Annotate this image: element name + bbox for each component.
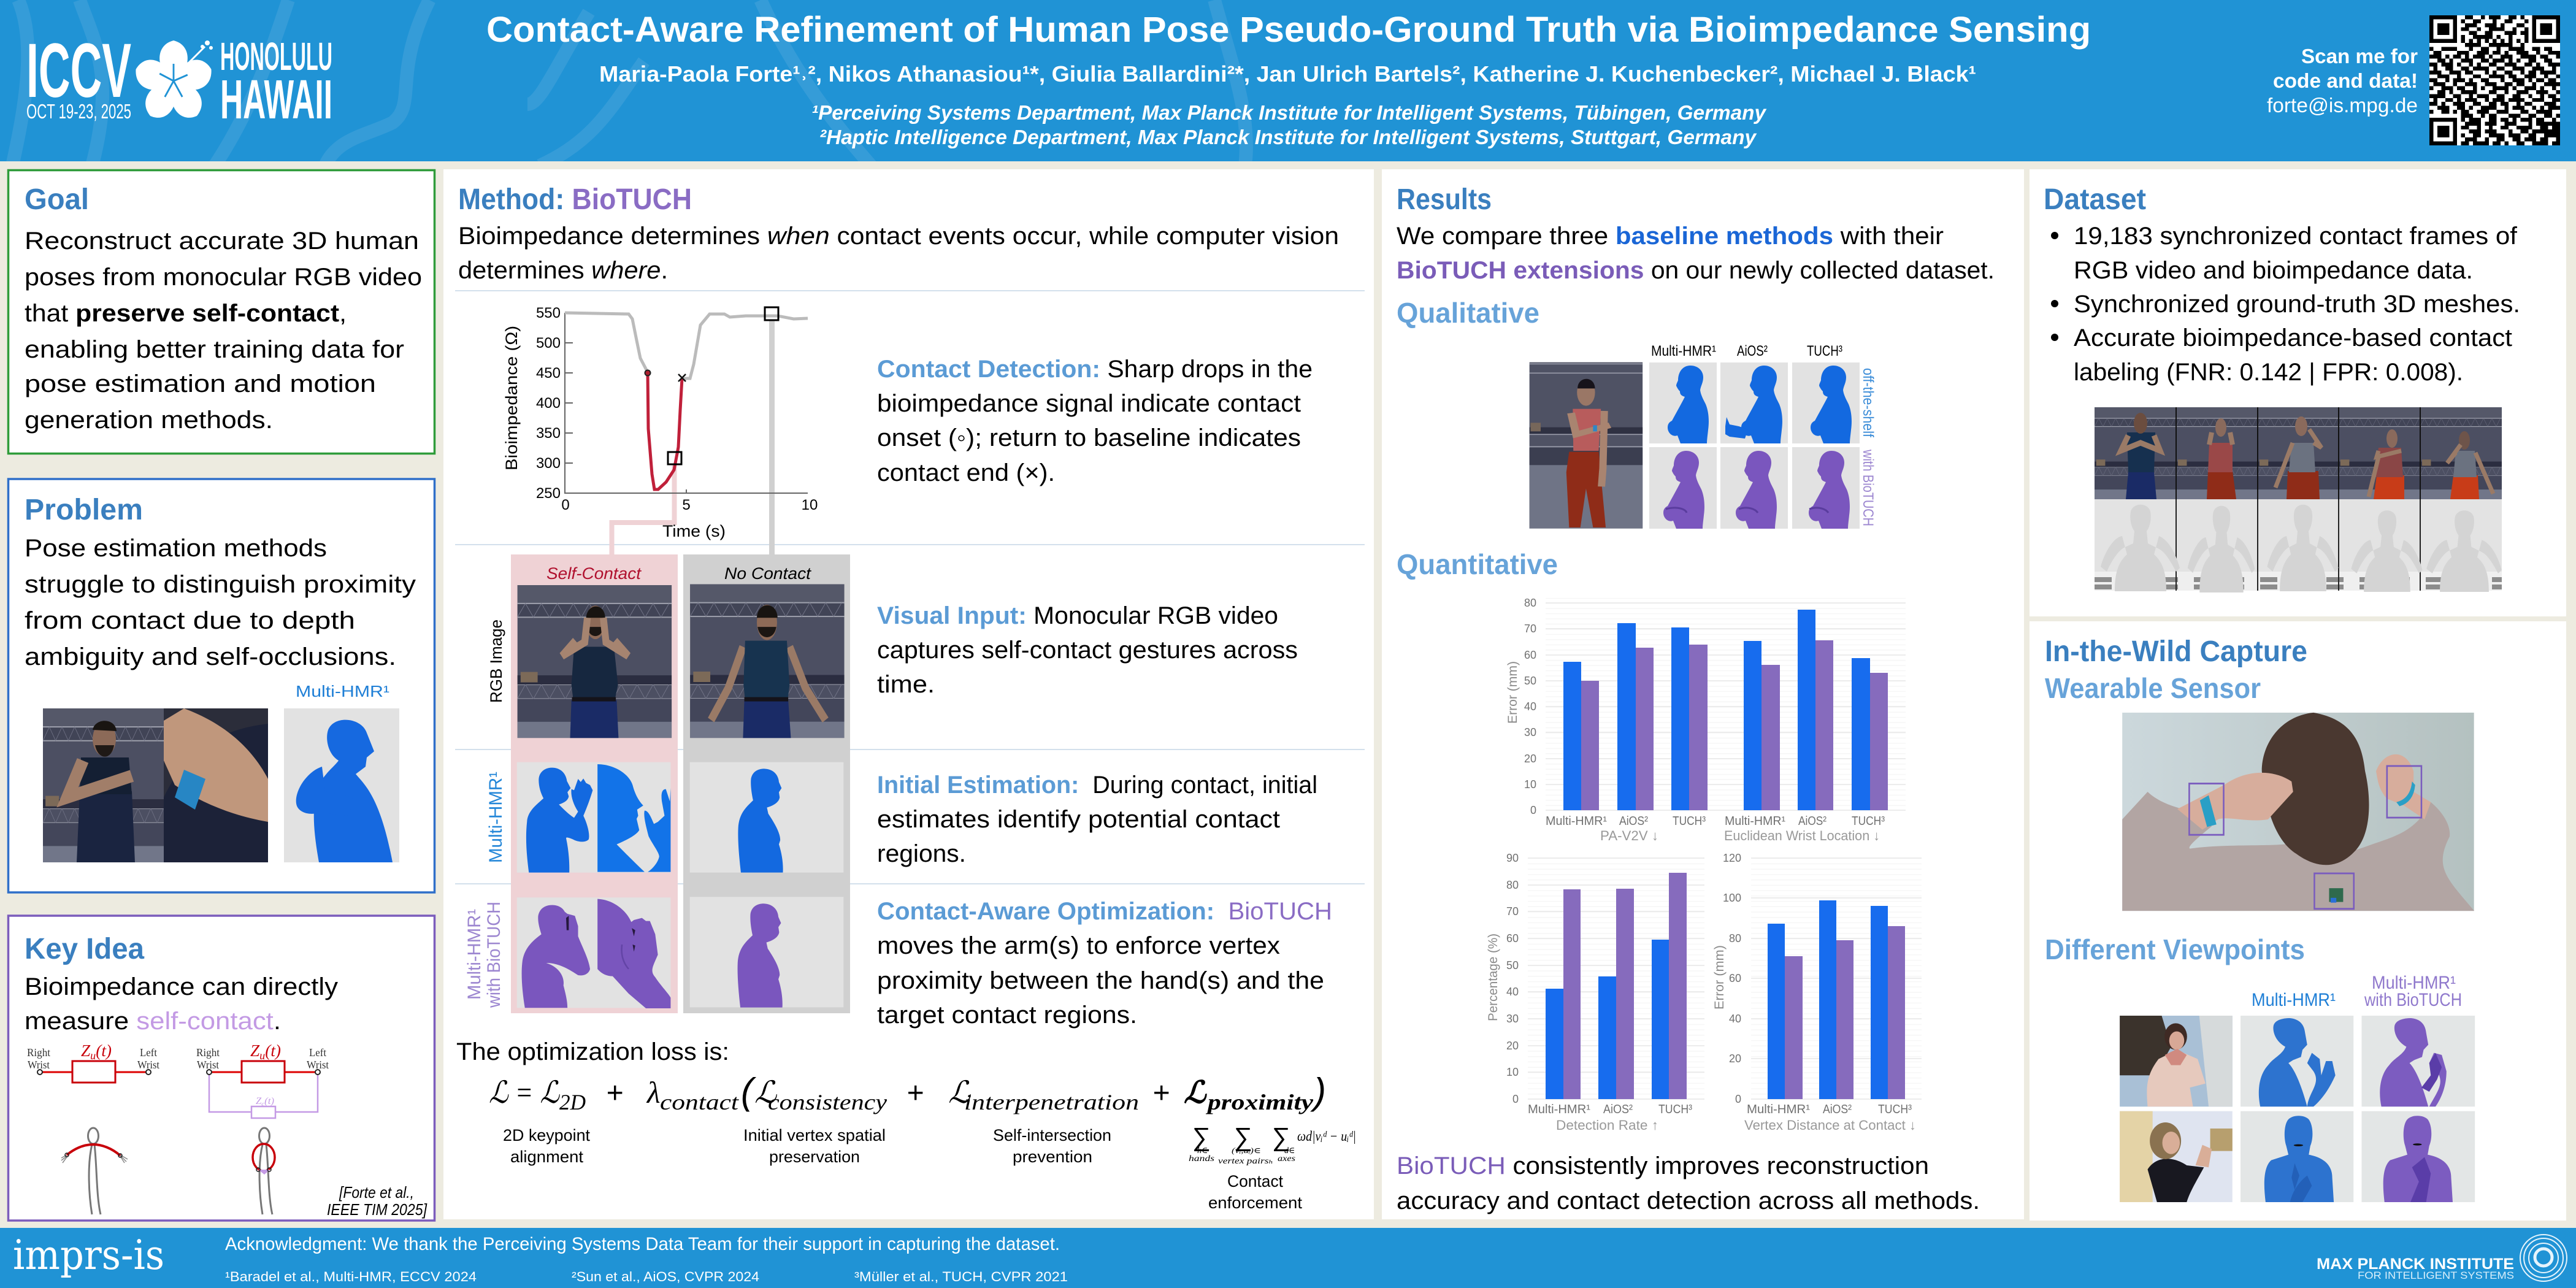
bar chart: detection rate: 90 xyxy=(1506,852,1519,864)
chart: bioimpedance signal: 250 xyxy=(536,485,561,502)
text: goal description: pose estimation and motion xyxy=(25,370,376,397)
tile: BioTUCH indoor xyxy=(2362,1111,2475,1202)
list: dataset facts: Synchronized ground-truth 3D meshes. xyxy=(2074,291,2520,318)
panel: dataset xyxy=(2030,169,2566,616)
citation: [Forte et al., xyxy=(339,1183,414,1202)
equation: proximity term: ∑ xyxy=(1192,1122,1211,1151)
bar chart: detection rate: Percentage (%) xyxy=(1486,933,1500,1021)
equation: optimization loss: + xyxy=(1152,1077,1170,1110)
text: method intro xyxy=(458,223,1339,284)
equation: optimization loss: + xyxy=(606,1077,623,1110)
labels: viewpoint columns xyxy=(2252,973,2462,1010)
text: problem description: from contact due to depth xyxy=(25,607,355,634)
tile: BioTUCH outdoor xyxy=(2362,1016,2475,1106)
equation: optimization loss: proximity xyxy=(1205,1090,1314,1114)
column labels: Multi-HMR¹ xyxy=(1651,343,1716,359)
text: visual input: captures self-contact gestures across xyxy=(877,637,1298,664)
bar chart: vertex distance at contact: Error (mm) xyxy=(1712,945,1727,1010)
logo: ICCV Honolulu Hawaii: OCT 19-23, 2025 xyxy=(26,100,131,123)
bar chart: PA-V2V and wrist location error: 30 xyxy=(1524,726,1536,738)
circuit diagram: self-contact: Z xyxy=(256,1096,261,1106)
list: dataset facts: 19,183 synchronized contact frames of xyxy=(2074,223,2518,250)
tile: Multi-HMR outdoor xyxy=(2241,1016,2353,1106)
text: goal description: generation methods. xyxy=(25,407,273,434)
circuit diagram: no contact: Wrist xyxy=(137,1059,159,1071)
circuit diagram: no contact: Z xyxy=(81,1041,90,1060)
photo: woman outdoors xyxy=(2120,1016,2233,1106)
chart: bioimpedance signal xyxy=(502,305,818,540)
text: problem description: Pose estimation methods xyxy=(25,535,327,562)
text: contact-aware optimization: Contact-Aware Optimization: BioTUCH xyxy=(877,898,1332,925)
logo: imprs-is: imprs-is xyxy=(13,1232,164,1279)
bar chart: detection rate: 40 xyxy=(1506,986,1519,998)
photo: man with arm across body and hand close-up xyxy=(43,708,268,862)
scan callout xyxy=(2267,45,2418,117)
circuit diagram: no contact: u xyxy=(90,1049,96,1062)
caption: self-intersection prevention xyxy=(993,1126,1111,1166)
chart: bioimpedance signal: 350 xyxy=(536,425,561,442)
labels: viewpoint columns: Multi-HMR¹ xyxy=(2252,990,2336,1010)
logo: Max Planck Institute xyxy=(2317,1235,2567,1281)
circuit diagram: self-contact: Left xyxy=(309,1046,326,1059)
heading: goal: Goal xyxy=(25,183,89,216)
chart: bioimpedance signal: 0 xyxy=(561,497,570,513)
panel: results xyxy=(1382,169,2024,1219)
bar chart: PA-V2V and wrist location error xyxy=(1506,597,1906,843)
heading: problem: Problem xyxy=(25,494,143,526)
equation: optimization loss: ℒ xyxy=(1184,1075,1207,1110)
text: contact detection: contact end (×). xyxy=(877,459,1055,486)
bar chart: vertex distance at contact: Multi-HMR¹ xyxy=(1747,1103,1810,1116)
text: contact detection xyxy=(877,356,1313,486)
bar chart: PA-V2V and wrist location error: 20 xyxy=(1524,753,1536,765)
bar chart: PA-V2V and wrist location error: 80 xyxy=(1524,597,1536,609)
row label: with BioTUCH: with BioTUCH xyxy=(1860,449,1876,526)
bar chart: vertex distance at contact: 120 xyxy=(1723,852,1741,864)
caption: 2D keypoint alignment: alignment xyxy=(510,1148,583,1166)
bar chart: vertex distance at contact: 80 xyxy=(1729,932,1741,945)
scan callout: forte@is.mpg.de xyxy=(2267,94,2418,117)
tile: AiOS with BioTUCH xyxy=(1720,447,1788,529)
text: contact-aware optimization xyxy=(877,898,1332,1029)
text: initial estimation: estimates identify potential contact xyxy=(877,806,1280,833)
heading: in-the-wild capture: In-the-Wild Capture xyxy=(2045,635,2307,668)
row label: Multi-HMR with BioTUCH: with BioTUCH xyxy=(484,902,504,1008)
bar chart: vertex distance at contact: AiOS² xyxy=(1823,1103,1852,1116)
equation: proximity term: ωd|vᵢᵈ − uᵢᵈ| xyxy=(1297,1129,1356,1144)
QR code xyxy=(2429,15,2560,145)
image strip: RGB frames xyxy=(2095,407,2502,591)
chart: bioimpedance signal: 10 xyxy=(802,497,818,513)
circuit diagram: self-contact: Wrist xyxy=(197,1059,219,1071)
heading: method: Method: BioTUCH xyxy=(458,183,692,216)
bar chart: PA-V2V and wrist location error: 0 xyxy=(1530,804,1536,816)
caption: 2D keypoint alignment: 2D keypoint xyxy=(503,1126,590,1144)
bar chart: detection rate: 70 xyxy=(1506,905,1519,918)
photo: woman crossing arm xyxy=(1530,362,1643,529)
tile: Multi-HMR self-contact xyxy=(517,762,670,873)
bar chart: PA-V2V and wrist location error: 70 xyxy=(1524,623,1536,635)
logo: ICCV Honolulu Hawaii xyxy=(26,28,332,131)
bar chart: PA-V2V and wrist location error: Euclidean Wrist Location ↓ xyxy=(1724,828,1880,843)
circuit diagram: no contact: Right xyxy=(27,1046,50,1059)
row label: Multi-HMR with BioTUCH xyxy=(464,902,504,1008)
bar chart: PA-V2V and wrist location error: TUCH³ xyxy=(1673,815,1706,828)
equation: proximity term xyxy=(1189,1122,1356,1166)
caption: 2D keypoint alignment xyxy=(503,1126,590,1166)
heading: qualitative: Qualitative xyxy=(1397,297,1539,329)
equation: optimization loss: 2D xyxy=(559,1090,586,1114)
heading: quantitative: Quantitative xyxy=(1397,548,1558,580)
text: visual input xyxy=(877,602,1298,698)
caption: contact enforcement xyxy=(1208,1172,1302,1212)
footer band xyxy=(0,1228,2576,1288)
caption: initial vertex spatial preservation: preservation xyxy=(769,1148,860,1166)
tile: TUCH with BioTUCH xyxy=(1792,447,1860,529)
equation: proximity term: vertex pairsₕ xyxy=(1218,1157,1273,1166)
bar chart: detection rate: 10 xyxy=(1506,1066,1519,1078)
text: key idea description: Bioimpedance can directly xyxy=(25,973,338,1000)
photo: woman indoors xyxy=(2120,1111,2233,1202)
authors: Maria-Paola Forte¹˒², Nikos Athanasiou¹*, Giulia Ballardini²*, Jan Ulrich Bartels², Katherine J. Kuchenbecker², Michael J. Black¹ xyxy=(599,61,1976,86)
qualitative grid xyxy=(1649,343,1876,529)
text: results intro: We compare three baseline methods with their xyxy=(1397,223,1944,250)
text: contact detection: Contact Detection: Sharp drops in the xyxy=(877,356,1313,383)
header band xyxy=(0,0,2576,166)
image strip: ground-truth meshes xyxy=(2095,499,2502,592)
bar chart: vertex distance at contact: 0 xyxy=(1735,1093,1741,1105)
logo: ICCV Honolulu Hawaii: ICCV xyxy=(26,28,131,113)
text: key idea description: measure self-contact . xyxy=(25,1008,281,1035)
bar chart: vertex distance at contact: 20 xyxy=(1729,1052,1741,1065)
bar chart: detection rate: TUCH³ xyxy=(1658,1103,1692,1116)
equation: optimization loss: ( xyxy=(741,1071,757,1112)
bar chart: PA-V2V and wrist location error: Multi-HMR¹ xyxy=(1546,815,1607,828)
logo: ICCV Honolulu Hawaii: HAWAII xyxy=(220,69,332,131)
text: results conclusion: accuracy and contact detection across all methods. xyxy=(1397,1187,1980,1214)
bar chart: PA-V2V and wrist location error: AiOS² xyxy=(1798,815,1827,828)
column labels: AiOS² xyxy=(1737,343,1768,359)
bar chart: detection rate: 80 xyxy=(1506,879,1519,891)
tile: TUCH off-the-shelf xyxy=(1792,362,1860,443)
bar chart: detection rate: Multi-HMR¹ xyxy=(1528,1103,1590,1116)
labels: viewpoint columns: Multi-HMR¹ xyxy=(2372,973,2456,993)
bar chart: detection rate: 0 xyxy=(1512,1093,1519,1105)
text: goal description: that preserve self-contact , xyxy=(25,300,347,327)
text: contact-aware optimization: moves the arm(s) to enforce vertex xyxy=(877,932,1280,959)
viewpoint grid xyxy=(2120,1016,2475,1202)
text: goal description: enabling better training data for xyxy=(25,336,404,363)
chart: bioimpedance signal: 5 xyxy=(682,497,691,513)
circuit diagram: self-contact: Z xyxy=(250,1041,259,1060)
circuit diagram: no contact: Wrist xyxy=(28,1059,50,1071)
text: results conclusion: BioTUCH consistently improves reconstruction xyxy=(1397,1152,1929,1179)
bar chart: detection rate: AiOS² xyxy=(1603,1103,1633,1116)
tile: AiOS off-the-shelf xyxy=(1720,362,1788,443)
bar chart: PA-V2V and wrist location error: PA-V2V ↓ xyxy=(1600,828,1658,843)
bar chart: detection rate: Detection Rate ↑ xyxy=(1556,1117,1658,1133)
label: Multi-HMR: Multi-HMR¹ xyxy=(296,682,389,700)
caption: self-intersection prevention: prevention xyxy=(1013,1148,1092,1166)
row label: RGB image: RGB Image xyxy=(487,619,505,703)
text: visual input: time. xyxy=(877,671,935,698)
chart: bioimpedance signal: 400 xyxy=(536,395,561,412)
bar chart: PA-V2V and wrist location error: 50 xyxy=(1524,675,1536,687)
equation: optimization loss: contact xyxy=(660,1090,739,1114)
chart: bioimpedance signal: 500 xyxy=(536,335,561,351)
tile: Multi-HMR no contact xyxy=(690,762,843,873)
text: results conclusion xyxy=(1397,1152,1980,1214)
logo: Max Planck Institute: FOR INTELLIGENT SYSTEMS xyxy=(2358,1270,2514,1281)
connector: no contact xyxy=(769,320,775,556)
column: self-contact xyxy=(511,554,678,1013)
equation: proximity term: ∑ xyxy=(1234,1122,1252,1151)
citation: IEEE TIM 2025] xyxy=(327,1200,427,1219)
text: visual input: Visual Input: Monocular RGB video xyxy=(877,602,1278,629)
chart: bioimpedance signal: 300 xyxy=(536,455,561,472)
text: key idea description xyxy=(25,973,338,1035)
equation: optimization loss: λ xyxy=(646,1075,661,1110)
caption: contact enforcement: enforcement xyxy=(1208,1194,1302,1212)
heading: key idea: Key Idea xyxy=(25,933,144,965)
title: Contact-Aware Refinement of Human Pose Pseudo-Ground Truth via Bioimpedance Sensing xyxy=(486,10,2091,50)
heading: wearable sensor: Wearable Sensor xyxy=(2045,672,2261,704)
equation: optimization loss: interpenetration xyxy=(964,1090,1139,1114)
chart: bioimpedance signal: Time (s) xyxy=(662,522,726,540)
equation: proximity term: (vᵢ,uᵢ)∈ xyxy=(1232,1146,1261,1155)
row label: Multi-HMR: Multi-HMR¹ xyxy=(486,772,506,863)
circuit diagram: self-contact xyxy=(196,1041,329,1118)
text: goal description: Reconstruct accurate 3D human xyxy=(25,228,419,255)
circuit diagram: no contact: (t) xyxy=(96,1041,112,1060)
tile: BioTUCH no contact xyxy=(690,897,843,1008)
panel: in-the-wild capture xyxy=(2030,621,2566,1221)
affiliations xyxy=(811,101,1767,148)
equation: optimization loss: ) xyxy=(1310,1071,1326,1112)
affiliations: ²Haptic Intelligence Department, Max Planck Institute for Intelligent Systems, Stuttgart, Germany xyxy=(819,126,1757,148)
citation xyxy=(327,1183,427,1219)
bar chart: PA-V2V and wrist location error: TUCH³ xyxy=(1852,815,1885,828)
text: references: ³Müller et al., TUCH, CVPR 2021 xyxy=(854,1269,1068,1284)
text: initial estimation: Initial Estimation: During contact, initial xyxy=(877,772,1317,799)
text: references xyxy=(225,1269,1068,1284)
affiliations: ¹Perceiving Systems Department, Max Planck Institute for Intelligent Systems, Tübingen, Germany xyxy=(811,101,1767,124)
text: results intro: BioTUCH extensions on our newly collected dataset. xyxy=(1397,257,1995,284)
text: goal description: poses from monocular RGB video xyxy=(25,264,422,291)
logo: Max Planck Institute: MAX PLANCK INSTITUTE xyxy=(2317,1255,2514,1273)
equation: optimization loss: ℒ = ℒ xyxy=(489,1075,560,1110)
bar chart: vertex distance at contact: TUCH³ xyxy=(1878,1103,1912,1116)
caption: self-intersection prevention: Self-intersection xyxy=(993,1126,1111,1144)
text: method intro: Bioimpedance determines when contact events occur, while computer vision xyxy=(458,223,1339,250)
text: goal description xyxy=(25,228,422,434)
text: contact-aware optimization: target contact regions. xyxy=(877,1002,1137,1029)
photo: man with hands on face xyxy=(518,585,672,738)
caption: initial vertex spatial preservation: Initial vertex spatial xyxy=(743,1126,886,1144)
labels: viewpoint columns: with BioTUCH xyxy=(2364,990,2462,1010)
tile: Multi-HMR off-the-shelf xyxy=(1649,362,1717,443)
photo: wearable sensor on woman xyxy=(2122,713,2474,911)
panel: problem xyxy=(9,479,434,892)
bar chart: detection rate: 30 xyxy=(1506,1013,1519,1025)
bar chart: vertex distance at contact: 40 xyxy=(1729,1013,1741,1025)
column: no contact xyxy=(683,554,850,1013)
equation: optimization loss: ℒ xyxy=(948,1075,971,1110)
column labels xyxy=(1651,343,1842,359)
bar chart: vertex distance at contact xyxy=(1712,852,1922,1133)
chart: bioimpedance signal: 550 xyxy=(536,305,561,321)
tile: Multi-HMR indoor xyxy=(2241,1111,2353,1202)
equation: proximity term: d∈ xyxy=(1284,1146,1295,1156)
circuit diagram: no contact: Left xyxy=(140,1046,157,1059)
equation: optimization loss xyxy=(489,1071,1326,1114)
bar chart: PA-V2V and wrist location error: Error (mm) xyxy=(1506,661,1520,724)
list: dataset facts: RGB video and bioimpedance data. xyxy=(2074,257,2473,284)
equation: optimization loss: + xyxy=(907,1077,924,1110)
stick figure: hands touching xyxy=(253,1128,275,1214)
text: results intro xyxy=(1397,223,1995,284)
photo: man with arms down xyxy=(690,585,845,738)
text: loss heading: The optimization loss is: xyxy=(456,1038,729,1065)
text: initial estimation: regions. xyxy=(877,840,966,867)
scan callout: code and data! xyxy=(2273,69,2418,92)
text: references: ¹Baradel et al., Multi-HMR, ECCV 2024 xyxy=(225,1269,477,1284)
list: dataset facts: labeling (FNR: 0.142 | FPR: 0.008). xyxy=(2074,359,2463,386)
text: contact-aware optimization: proximity between the hand(s) and the xyxy=(877,967,1324,994)
connector: self-contact xyxy=(612,464,675,556)
chart: bioimpedance signal: Bioimpedance (Ω) xyxy=(502,326,521,470)
equation: proximity term: ∑ xyxy=(1272,1122,1290,1151)
text: problem description xyxy=(25,535,416,670)
bar chart: detection rate: 50 xyxy=(1506,959,1519,972)
row label: Multi-HMR with BioTUCH: Multi-HMR¹ xyxy=(464,909,485,1000)
text: initial estimation xyxy=(877,772,1317,867)
tile: Multi-HMR result xyxy=(284,708,399,862)
equation: proximity term: hands xyxy=(1189,1154,1215,1163)
bar chart: PA-V2V and wrist location error: AiOS² xyxy=(1619,815,1648,828)
text: method intro: determines where. xyxy=(458,257,668,284)
bar chart: detection rate: 20 xyxy=(1506,1040,1519,1052)
circuit diagram: self-contact: u xyxy=(259,1049,265,1062)
text: acknowledgment: Acknowledgment: We thank the Perceiving Systems Data Team for their support in capturing the dataset. xyxy=(225,1234,1060,1254)
panel: key idea xyxy=(9,916,434,1221)
circuit diagram: self-contact: c xyxy=(261,1100,264,1108)
text: contact detection: bioimpedance signal indicate contact xyxy=(877,390,1301,417)
equation: proximity term: axes xyxy=(1278,1154,1296,1163)
label: self-contact: Self-Contact xyxy=(546,564,642,583)
equation: optimization loss: ℒ xyxy=(754,1075,777,1110)
stick figure: arms apart xyxy=(61,1128,128,1214)
circuit diagram: self-contact: (t) xyxy=(265,1041,281,1060)
heading: different viewpoints: Different Viewpoints xyxy=(2045,933,2305,965)
text: references: ²Sun et al., AiOS, CVPR 2024 xyxy=(572,1269,759,1284)
text: problem description: ambiguity and self-occlusions. xyxy=(25,643,396,670)
circuit diagram: self-contact: Wrist xyxy=(307,1059,329,1071)
bar chart: vertex distance at contact: 100 xyxy=(1723,892,1741,904)
text: contact detection: onset (◦); return to baseline indicates xyxy=(877,424,1301,451)
panel: goal xyxy=(9,171,434,454)
list: dataset facts xyxy=(2051,223,2520,386)
text: problem description: struggle to distinguish proximity xyxy=(25,571,416,598)
bar chart: detection rate: 60 xyxy=(1506,932,1519,945)
tile: BioTUCH self-contact xyxy=(517,897,670,1008)
heading: dataset: Dataset xyxy=(2044,183,2146,216)
column labels: TUCH³ xyxy=(1807,343,1842,359)
caption: initial vertex spatial preservation xyxy=(743,1126,886,1166)
list: dataset facts: Accurate bioimpedance-based contact xyxy=(2074,324,2512,351)
bar chart: detection rate xyxy=(1486,852,1704,1133)
caption: contact enforcement: Contact xyxy=(1227,1172,1283,1190)
logo: ICCV Honolulu Hawaii: HONOLULU xyxy=(220,34,332,79)
heading: results: Results xyxy=(1397,183,1492,216)
circuit diagram: self-contact: (t) xyxy=(264,1096,274,1106)
equation: proximity term: h∈ xyxy=(1197,1146,1208,1156)
equation: optimization loss: consistency xyxy=(768,1090,887,1114)
circuit diagram: self-contact: Right xyxy=(196,1046,220,1059)
label: no contact: No Contact xyxy=(724,564,812,583)
chart: bioimpedance signal: 450 xyxy=(536,365,561,381)
bar chart: vertex distance at contact: 60 xyxy=(1729,972,1741,984)
bar chart: PA-V2V and wrist location error: Multi-HMR¹ xyxy=(1725,815,1785,828)
row label: off-the-shelf: off-the-shelf xyxy=(1860,368,1876,437)
bar chart: PA-V2V and wrist location error: 60 xyxy=(1524,649,1536,661)
bar chart: vertex distance at contact: Vertex Distance at Contact ↓ xyxy=(1744,1117,1916,1133)
scan callout: Scan me for xyxy=(2301,45,2418,67)
bar chart: PA-V2V and wrist location error: 10 xyxy=(1524,778,1536,791)
circuit diagram: no contact xyxy=(27,1041,159,1083)
panel: method xyxy=(443,169,1374,1219)
tile: Multi-HMR with BioTUCH xyxy=(1649,447,1717,529)
bar chart: PA-V2V and wrist location error: 40 xyxy=(1524,700,1536,713)
